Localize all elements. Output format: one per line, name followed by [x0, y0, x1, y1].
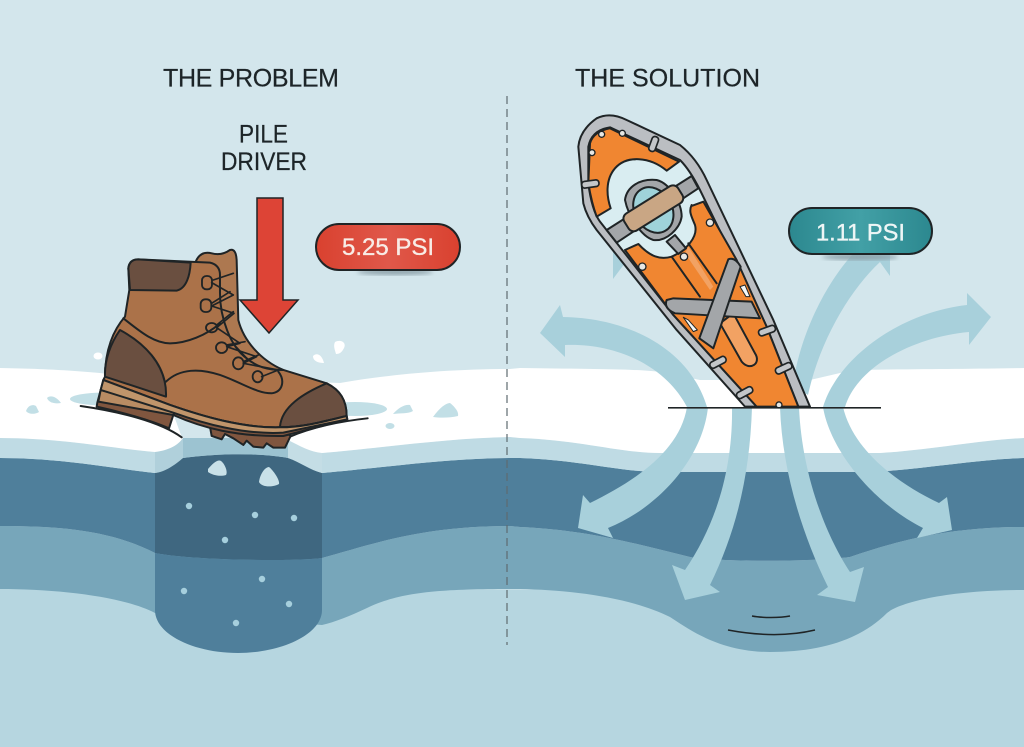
label: pile driver: DRIVER — [221, 148, 307, 176]
arrow down far right — [823, 407, 952, 538]
center strip — [685, 247, 713, 290]
ice chunks — [208, 460, 227, 476]
label: pile driver — [221, 120, 307, 176]
ring — [625, 180, 682, 240]
heel patch — [105, 330, 166, 397]
label: pile driver: PILE — [239, 120, 288, 148]
frame clips — [581, 136, 793, 400]
binding link — [667, 235, 686, 254]
pressure arrows — [540, 252, 991, 602]
hole wall — [183, 438, 288, 458]
frame — [578, 115, 810, 407]
eyelets — [201, 276, 263, 382]
badge: 1.11 PSI: 1.11 PSI — [816, 220, 905, 246]
laces — [212, 273, 278, 377]
badge: 5.25 PSI: 5.25 PSI — [342, 234, 434, 261]
snowshoe — [578, 115, 810, 408]
badge shadow — [822, 254, 898, 260]
rear deck — [625, 202, 798, 407]
upper seams — [123, 318, 282, 393]
front deck — [588, 128, 679, 217]
outsole lugs — [210, 427, 291, 448]
compressed boot hole — [155, 413, 322, 653]
badge: 1.11 PSI — [789, 208, 932, 254]
lower snow layer — [0, 589, 1024, 747]
sole base — [97, 380, 347, 436]
arrow up behind badge — [793, 252, 890, 395]
strap horizontal — [666, 298, 760, 318]
snow splashes — [26, 392, 458, 429]
layer: medium snow — [0, 526, 1024, 652]
arrow down inner left — [672, 407, 752, 600]
layer: pale snow band — [0, 437, 1024, 473]
suspended particles — [181, 503, 297, 626]
hole column upper — [155, 454, 322, 560]
hole column lower — [155, 553, 322, 653]
settlement marks — [728, 616, 815, 634]
strap diagonal — [699, 259, 741, 348]
heel light band — [98, 390, 177, 415]
hole right facet — [288, 440, 322, 473]
deck bolts — [589, 130, 782, 408]
tongue — [196, 250, 283, 383]
center divider — [506, 96, 508, 645]
handle — [621, 183, 685, 234]
center slot — [720, 313, 757, 366]
hole left facet — [155, 438, 183, 473]
ring center — [625, 180, 681, 240]
boot — [81, 250, 368, 448]
center rails — [672, 243, 717, 297]
ground line right — [290, 418, 368, 437]
small arrowhead behind snowshoe — [613, 243, 640, 279]
collar patch — [128, 259, 191, 291]
layer: white snow — [0, 368, 1024, 453]
ground line left — [81, 406, 182, 437]
arrow down far left — [578, 407, 708, 538]
deck gaps — [683, 285, 750, 332]
ground base — [0, 368, 1024, 652]
sole top band — [101, 380, 347, 433]
badge shadow — [357, 269, 433, 275]
heading: the problem: THE PROBLEM — [163, 64, 339, 92]
arrow up left — [540, 305, 707, 407]
arrow down inner right — [780, 407, 864, 602]
heading: the solution: THE SOLUTION — [575, 64, 760, 92]
arrow up right — [823, 293, 991, 407]
toe cap — [280, 383, 347, 427]
red force arrow — [240, 198, 298, 333]
upper — [103, 259, 347, 427]
snowshoe ground line — [668, 407, 881, 409]
airborne snow — [94, 341, 345, 363]
badge: 5.25 PSI — [316, 224, 460, 270]
snow under heel — [173, 413, 290, 438]
opening — [588, 127, 798, 407]
binding crossbar — [607, 176, 698, 243]
layer: dark compact snow — [0, 458, 1024, 561]
